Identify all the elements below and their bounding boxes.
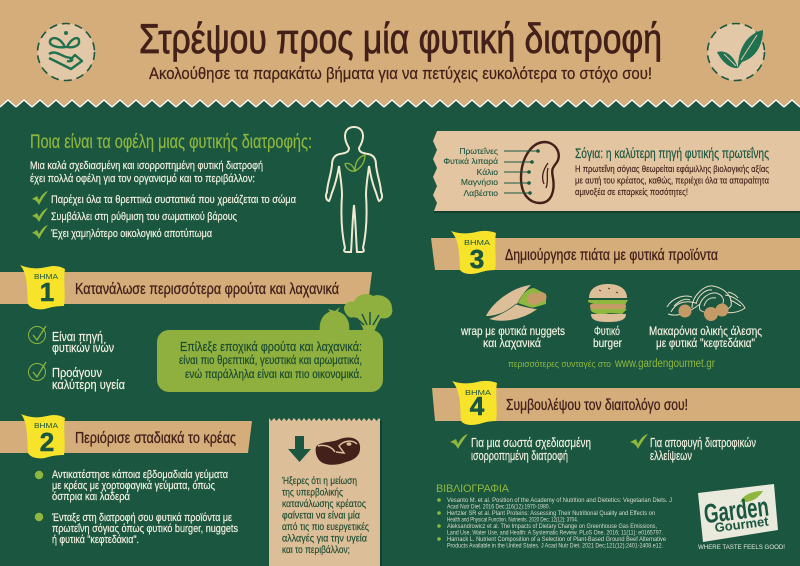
benefit list bbox=[32, 191, 297, 240]
dish labels: Φυτικό bbox=[594, 324, 620, 338]
meat note text: και το περιβάλλον; bbox=[282, 544, 350, 556]
icon: pasta with balls bbox=[667, 286, 745, 321]
step 2 advice list: όσπρια και λαδερά bbox=[52, 491, 131, 503]
icon: human body bbox=[326, 127, 382, 252]
title: Στρέψου προς μία φυτική διατροφή bbox=[139, 15, 662, 62]
bibliography list: Vesanto M. et al. Position of the Academy of Nutrition and Dietetics: Vegetarian Diets. J bbox=[447, 498, 672, 504]
benefits heading: Ποια είναι τα οφέλη μιας φυτικής διατροφής: bbox=[30, 132, 312, 153]
step 3 heading: Δημιούργησε πιάτα με φυτικά προϊόντα bbox=[505, 247, 718, 264]
step 3 band bbox=[431, 238, 800, 270]
dietitian reasons: Για αποφυγή διατροφικών bbox=[650, 435, 756, 450]
step 2 advice list: Αντικατέστησε κάποια εβδομαδιαία γεύματα bbox=[52, 469, 229, 481]
nutrient labels: Μαγνήσιο bbox=[461, 177, 498, 187]
dish labels: και λαχανικά bbox=[483, 336, 541, 350]
step 2 advice list: πρωτεΐνη σόγιας όπως φυτικό burger, nuggets bbox=[52, 523, 238, 535]
benefit list: Συμβάλλει στη ρύθμιση του σωματικού βάρους bbox=[51, 211, 237, 223]
icon: steak bbox=[316, 437, 360, 465]
bibliography heading: ΒΙΒΛΙΟΓΡΑΦΙΑ bbox=[436, 483, 510, 495]
step 1 benefits: καλύτερη υγεία bbox=[52, 377, 125, 392]
step 1 heading: Κατανάλωσε περισσότερα φρούτα και λαχανικά bbox=[75, 281, 339, 298]
step 2 badge bbox=[21, 414, 65, 458]
nutrient labels: Φυτικά λιπαρά bbox=[443, 156, 498, 166]
step 2 advice list: με κρέας με χορτοφαγικά γεύματα, όπως bbox=[52, 480, 215, 492]
benefits intro text: έχει πολλά οφέλη για τον οργανισμό και το περιβάλλον: bbox=[30, 173, 255, 185]
icon: tomato and broccoli bbox=[320, 294, 392, 332]
nutrient labels: Πρωτεΐνες bbox=[459, 146, 498, 156]
step 1 benefits: Είναι πηγή bbox=[52, 329, 103, 344]
dietitian reasons bbox=[450, 434, 756, 463]
nutrient labels: Λαβέστιο bbox=[464, 188, 498, 198]
step 4 band bbox=[432, 388, 800, 421]
step 1 badge: ΒΗΜΑ bbox=[34, 274, 58, 281]
bibliography list: Hertzler SR et al. Plant Proteins: Assessing Their Nutritional Quality and Effects on bbox=[447, 511, 655, 517]
step 1 benefits: Προάγουν bbox=[52, 365, 102, 380]
callout: seasonal produce bbox=[157, 330, 383, 392]
step 2 band bbox=[0, 421, 252, 453]
step 3 bbox=[431, 231, 800, 370]
header banner bbox=[0, 0, 800, 109]
icon: wrap bbox=[486, 285, 546, 321]
soy text bbox=[575, 164, 769, 198]
step 1 badge bbox=[20, 265, 65, 309]
bibliography list: Acad Nutr Diet. 2016 Dec;116(12):1970-1980. bbox=[447, 504, 550, 510]
logo: Garden Gourmet: WHERE TASTE FEELS GOOD! bbox=[698, 544, 785, 551]
callout: seasonal produce: είναι πιο θρεπτικά, γευστικά και αρωματικά, bbox=[179, 355, 362, 367]
dietitian reasons: ισορροπημένη διατροφή bbox=[471, 448, 568, 463]
step 4 heading: Συμβουλέψου τον διαιτολόγο σου! bbox=[506, 397, 688, 414]
bibliography list: Aleksandrowicz et al. The Impacts of Dietary Change on Greenhouse Gas Emissions, bbox=[447, 524, 657, 530]
step 2 badge: ΒΗΜΑ bbox=[34, 423, 58, 430]
icon: soybean diagram bbox=[504, 142, 559, 203]
benefit list: Έχει χαμηλότερο οικολογικό αποτύπωμα bbox=[50, 228, 213, 240]
step 1 badge: 1 bbox=[40, 277, 54, 307]
dietitian reasons: Για μια σωστά σχεδιασμένη bbox=[471, 435, 591, 450]
bibliography list: Products Available in the United States. J Acad Nutr Diet. 2021 Dec;121(12):2401-2408.e12. bbox=[447, 544, 663, 550]
dish labels: wrap με φυτικά nuggets bbox=[460, 324, 565, 338]
meat note text bbox=[281, 475, 369, 556]
step 1 benefits bbox=[28, 326, 125, 392]
callout: seasonal produce: ενώ παράλληλα είναι και πιο οικονομικά. bbox=[185, 369, 362, 381]
nutrient labels bbox=[443, 146, 498, 198]
step 2 badge: 2 bbox=[40, 427, 54, 457]
step 4 badge: ΒΗΜΑ bbox=[465, 390, 491, 397]
step 2 advice list bbox=[35, 469, 238, 546]
dietitian reasons: ελλείψεων bbox=[650, 448, 692, 463]
bibliography list: Health and Physical Function. Nutrients. 2020 Dec; 12(12): 3704. bbox=[447, 518, 578, 524]
dish labels: burger bbox=[593, 336, 622, 350]
soy text: αμινοξέα σε επαρκείς ποσότητες! bbox=[575, 187, 688, 198]
step 3 badge: 3 bbox=[470, 244, 484, 274]
bibliography list: Harnack L. Nutrient Composition of a Selection of Plant-Based Ground Beef Alternative bbox=[447, 537, 667, 543]
meat note text: κατανάλωσης κρέατος bbox=[282, 498, 366, 510]
step 1 benefits: φυτικών ινών bbox=[52, 340, 114, 355]
callout: seasonal produce: Επίλεξε εποχικά φρούτα και λαχανικά: bbox=[180, 339, 362, 354]
step 4 badge: 4 bbox=[470, 391, 485, 421]
logo: Garden Gourmet: Garden bbox=[702, 492, 770, 529]
benefit list: Παρέχει όλα τα θρεπτικά συστατικά που χρειάζεται το σώμα bbox=[51, 194, 297, 206]
meat note text: Ήξερες ότι η μείωση bbox=[281, 475, 357, 487]
panel: benefits bbox=[30, 127, 382, 252]
recipes link: περισσότερες συνταγές στο bbox=[508, 359, 611, 370]
meat note text: από τις πιο ευεργετικές bbox=[282, 521, 369, 533]
step 4 badge bbox=[452, 381, 497, 425]
panel: soy protein bbox=[433, 131, 800, 213]
benefits intro text bbox=[30, 160, 263, 185]
meat note text: αλλαγές για την υγεία bbox=[282, 532, 367, 544]
icon: down arrow bbox=[288, 436, 311, 462]
bibliography list bbox=[437, 498, 672, 550]
icon: burger bbox=[588, 284, 628, 322]
step 3 badge bbox=[451, 231, 496, 274]
panel: meat reduction note bbox=[269, 418, 382, 566]
recipes link: www.gardengourmet.gr bbox=[614, 358, 715, 370]
step 2 advice list: ή φυτικά "κεφτεδάκια". bbox=[52, 534, 139, 546]
icon: leaf check bbox=[708, 24, 764, 80]
step 2 advice list: Ένταξε στη διατροφή σου φυτικά προϊόντα με bbox=[51, 512, 232, 524]
step 2 heading: Περιόρισε σταδιακά το κρέας bbox=[75, 430, 236, 447]
bibliography bbox=[436, 483, 672, 550]
icon: hand holding plant bbox=[38, 24, 94, 80]
meat note text: της υπερβολικής bbox=[282, 486, 343, 498]
step 1 bbox=[0, 265, 392, 392]
step 1 band bbox=[0, 272, 372, 304]
dish labels: Μακαρόνια ολικής άλεσης bbox=[649, 324, 762, 338]
dish labels bbox=[460, 324, 762, 350]
recipes link bbox=[508, 358, 715, 370]
nutrient labels: Κάλιο bbox=[477, 167, 498, 177]
step 4 bbox=[432, 381, 800, 463]
bibliography list: Land Use, Water Use, and Health: A Systematic Review. PLoS One. 2016; 11(11): e0165797. bbox=[447, 530, 663, 536]
dish labels: με φυτικά "κεφτεδάκια" bbox=[656, 336, 755, 350]
step 3 badge: ΒΗΜΑ bbox=[464, 240, 490, 247]
step 2 bbox=[0, 414, 382, 566]
logo: Garden Gourmet: Gourmet bbox=[714, 514, 770, 535]
meat note text: φαίνεται να είναι μία bbox=[282, 510, 360, 522]
subtitle: Ακολούθησε τα παρακάτω βήματα για να πετύχεις ευκολότερα το στόχο σου! bbox=[149, 65, 652, 83]
logo: Garden Gourmet bbox=[698, 484, 785, 551]
benefits intro text: Μια καλά σχεδιασμένη και ισορροπημένη φυτική διατροφή bbox=[30, 160, 263, 172]
